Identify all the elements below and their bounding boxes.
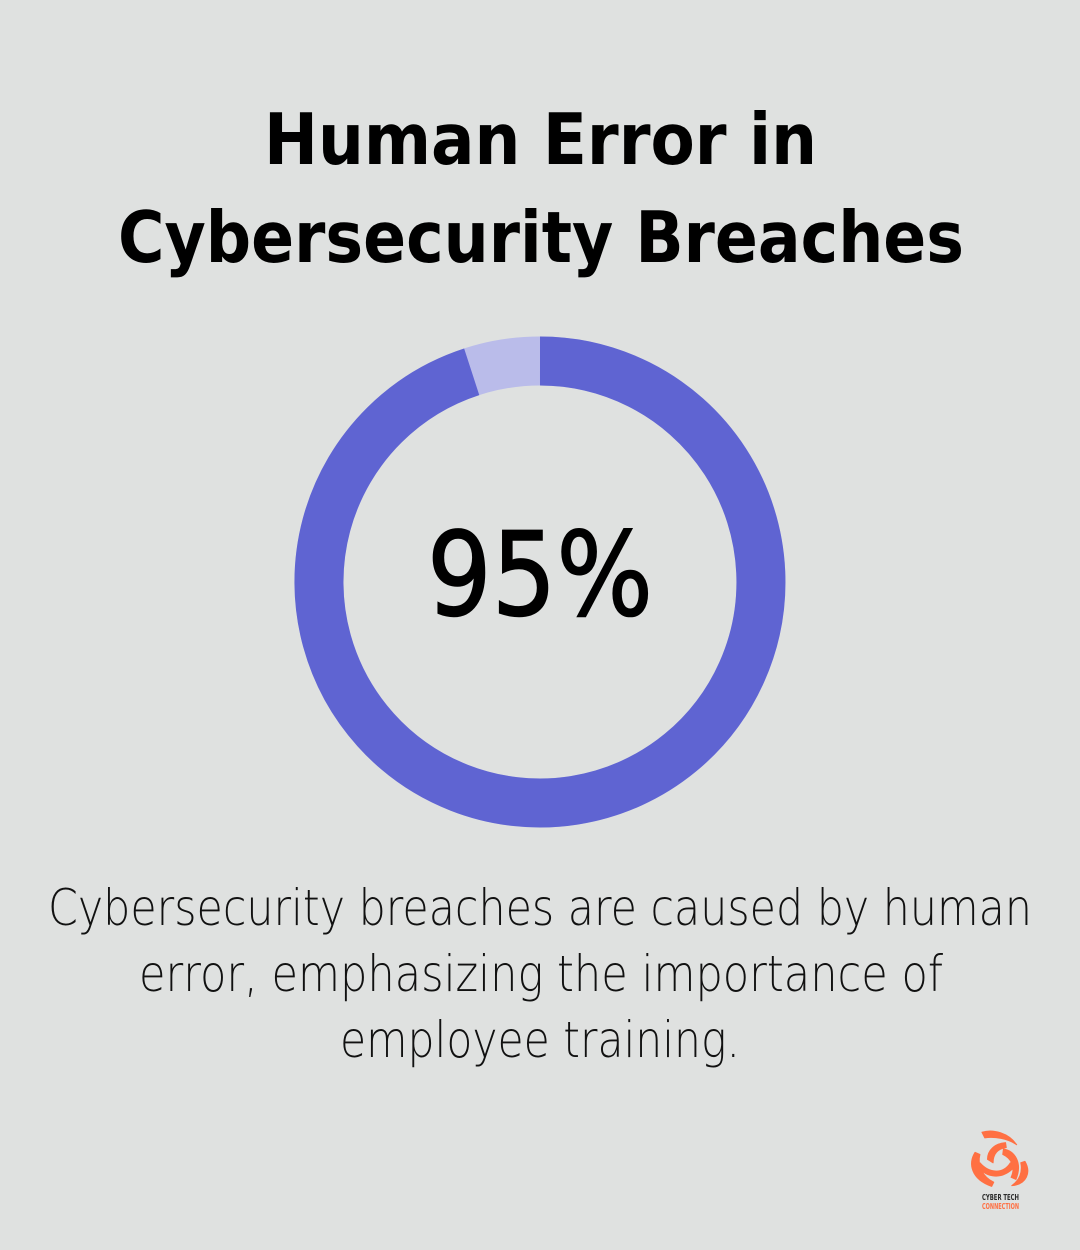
title: Human Error in [264,98,817,181]
chart track: remaining 5% [319,361,761,803]
icon: three-blade swirl [972,1131,1028,1186]
logo wordmark: connection: CONNECTION [982,1202,1019,1211]
description text: error, emphasizing the importance of [139,945,943,1003]
chart value arc: 95% [319,361,761,803]
title [118,98,964,279]
logo wordmark: cyber tech: CYBER TECH [982,1193,1019,1202]
chart center value: 95% [427,508,653,643]
donut chart: 95% [319,361,761,803]
title: Cybersecurity Breaches [118,196,964,279]
description text [48,879,1032,1069]
description text: employee training. [340,1011,740,1069]
logo: Cyber Tech Connection [972,1131,1028,1211]
